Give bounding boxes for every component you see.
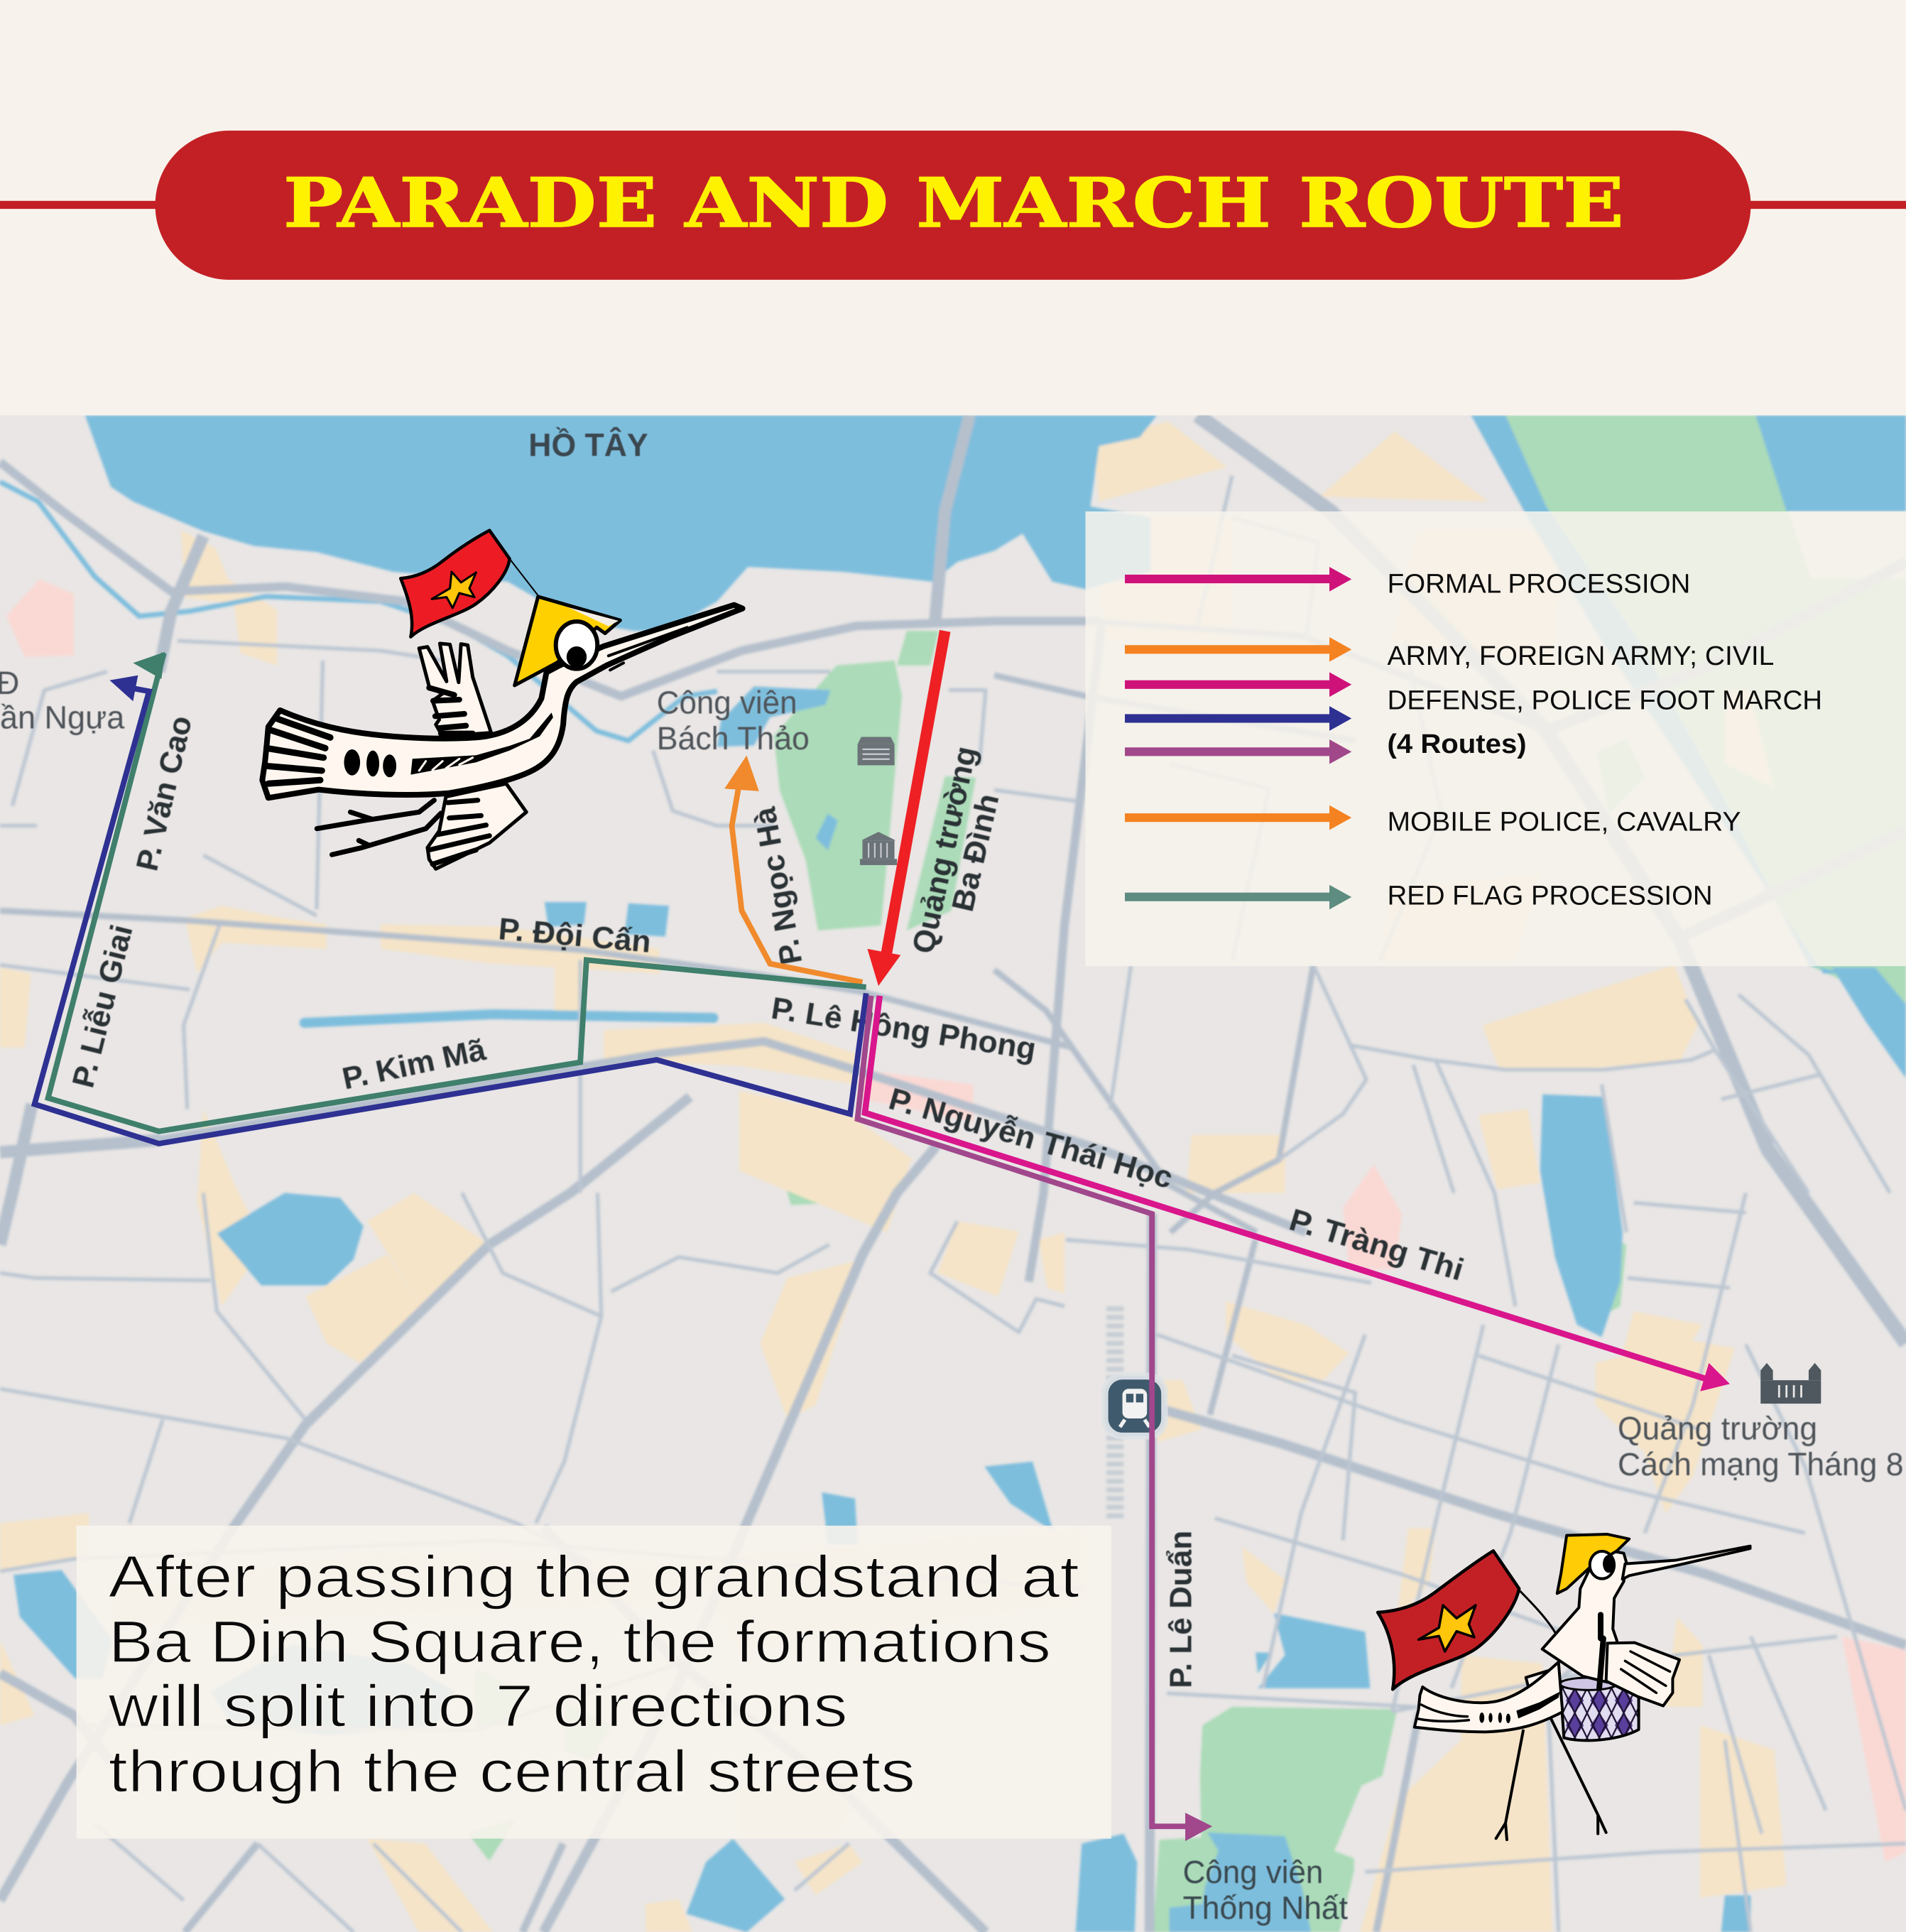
crane 1: eye bbox=[556, 622, 597, 669]
label: Bach Thao park bbox=[657, 685, 810, 756]
label: Le Duan: P. Lê Duẩn bbox=[1165, 1531, 1199, 1688]
crane 1: tail feathers bbox=[266, 719, 330, 783]
header rule bbox=[0, 201, 1906, 209]
street map base layer bbox=[0, 416, 1906, 1932]
crane 2: hat bbox=[1557, 1534, 1629, 1593]
label: Kim Ma: P. Kim Mã bbox=[339, 1033, 489, 1096]
note text: through the central streets bbox=[109, 1738, 915, 1804]
map: water bodies bbox=[13, 416, 1906, 1932]
crane 2: drum bbox=[1560, 1681, 1639, 1740]
route: red formal procession through Ba Dinh bbox=[867, 631, 945, 986]
label: Ba Dinh: Ba Đình bbox=[946, 791, 1006, 915]
legend panel bbox=[1086, 511, 1906, 966]
crane 2: eye bbox=[1590, 1551, 1614, 1579]
note text: will split into 7 directions bbox=[108, 1673, 848, 1740]
legend text: second line: DEFENSE, POLICE FOOT MARCH bbox=[1388, 685, 1822, 715]
legend arrow: civil defense bbox=[1125, 706, 1351, 731]
crane 2: right wing bbox=[1606, 1643, 1679, 1706]
route: navy bbox=[35, 675, 866, 1144]
map: parks and green areas bbox=[468, 416, 1906, 1932]
label: Ho Tay: HỒ TÂY bbox=[528, 427, 648, 463]
legend arrow: police foot march bbox=[1125, 739, 1351, 764]
crane 1: body and neck bbox=[262, 605, 743, 798]
label: Bach Thao park: Công viên bbox=[657, 685, 797, 721]
route: red flag procession, green bbox=[48, 652, 866, 1131]
map: built-up orange blocks bbox=[0, 421, 1787, 1932]
map: minor streets bbox=[0, 476, 1906, 1932]
crane 1: legs bbox=[317, 801, 441, 854]
label: Le Hong Phong: P. Lê Hồng Phong bbox=[769, 992, 1038, 1067]
page header background bbox=[0, 0, 1906, 416]
map: canals and small rivers bbox=[0, 482, 717, 1023]
crane 1: flag bbox=[401, 531, 510, 637]
crane 1: beak detail bbox=[609, 627, 687, 670]
route: orange, mobile police and cavalry via Ngoc Ha bbox=[724, 756, 862, 982]
crane 2: pupil bbox=[1603, 1555, 1615, 1573]
note text bbox=[108, 1544, 1079, 1804]
icon: mausoleum bbox=[860, 832, 897, 865]
crane 2: drum top bbox=[1560, 1678, 1617, 1690]
crane 1: flag star bbox=[432, 572, 476, 608]
crane 2: tail wing bbox=[1415, 1662, 1562, 1732]
icon: railway station bbox=[1101, 1373, 1168, 1439]
crane 1: spots bbox=[344, 749, 396, 777]
routes bbox=[35, 631, 1730, 1841]
crane 2: drum strap bbox=[1599, 1614, 1603, 1688]
label: August Revolution Square bbox=[1618, 1410, 1904, 1482]
crane 1: pupil bbox=[567, 646, 587, 668]
label: Hang Ngua: ần Ngựa bbox=[0, 699, 125, 735]
crane 1: inner wing strip bbox=[410, 712, 553, 775]
map background bbox=[0, 416, 1906, 1932]
legend arrow: army bbox=[1125, 637, 1351, 662]
legend text: four routes: (4 Routes) bbox=[1388, 729, 1527, 759]
crane 2: wing strip bbox=[1516, 1692, 1560, 1718]
map: main roads bbox=[0, 416, 1906, 1932]
illustration: flying crane with flag bbox=[262, 531, 743, 869]
crane 2: neck and chest bbox=[1542, 1551, 1626, 1682]
crane 2: flag star bbox=[1419, 1605, 1476, 1651]
crane 2: beak bbox=[1623, 1546, 1750, 1579]
legend text: formal procession: FORMAL PROCESSION bbox=[1388, 569, 1690, 599]
map: pink zones bbox=[6, 579, 1906, 1862]
label: Nguyen Thai Hoc: P. Nguyễn Thái Học bbox=[885, 1081, 1177, 1195]
route: purple to Thong Nhat park bbox=[858, 996, 1212, 1841]
crane 1: conical hat bbox=[515, 597, 620, 685]
label: Trang Thi: P. Tràng Thi bbox=[1285, 1203, 1468, 1288]
legend arrow: formal procession bbox=[1125, 567, 1351, 592]
header pill bbox=[156, 131, 1750, 280]
illustration: standing crane with drum and flag bbox=[1378, 1534, 1750, 1840]
note panel bbox=[77, 1526, 1111, 1839]
label: August Revolution Square: Cách mạng Tháng 8 bbox=[1618, 1446, 1904, 1482]
title: PARADE AND MARCH ROUTE bbox=[283, 163, 1624, 243]
legend bbox=[1125, 567, 1822, 911]
label: Bach Thao park: Bách Thảo bbox=[657, 720, 810, 756]
label: Thong Nhat park: Thống Nhất bbox=[1183, 1889, 1349, 1926]
label: Quang truong: Quảng trường bbox=[906, 744, 984, 957]
label: August Revolution Square: Quảng trường bbox=[1618, 1410, 1817, 1446]
note text: After passing the grandstand at bbox=[109, 1544, 1079, 1610]
legend arrow: red flag procession bbox=[1125, 885, 1351, 909]
legend arrow: foreign army bbox=[1125, 672, 1351, 697]
label: Ngoc Ha: P. Ngọc Hà bbox=[748, 804, 809, 967]
route: magenta to August Revolution Square bbox=[865, 996, 1730, 1391]
label: Thong Nhat park bbox=[1183, 1854, 1349, 1926]
legend text: army and police routes: ARMY, FOREIGN ARMY; CIVIL bbox=[1388, 641, 1774, 671]
crane 2: flag pole bbox=[1518, 1589, 1556, 1634]
icon: opera house bbox=[1760, 1363, 1821, 1404]
legend arrow: mobile police bbox=[1125, 805, 1351, 830]
crane 2: legs bbox=[1496, 1712, 1606, 1840]
map labels bbox=[0, 427, 1904, 1926]
crane 2: small wing behind bbox=[1526, 1669, 1556, 1688]
legend text: mobile police: MOBILE POLICE, CAVALRY bbox=[1388, 806, 1741, 837]
crane 2: flag bbox=[1378, 1551, 1519, 1689]
icon: government building 1 bbox=[858, 737, 895, 765]
label: Lieu Giai: P. Liễu Giai bbox=[65, 921, 139, 1091]
crane 1: flag pole bbox=[510, 559, 538, 595]
label: Thong Nhat park: Công viên bbox=[1183, 1854, 1323, 1890]
label: Van Cao: P. Văn Cao bbox=[130, 712, 199, 874]
note text: Ba Dinh Square, the formations bbox=[109, 1609, 1051, 1675]
label: Doi Can: P. Đội Cấn bbox=[497, 912, 653, 960]
crane 1: lower wing bbox=[428, 783, 526, 869]
legend text: red flag: RED FLAG PROCESSION bbox=[1388, 880, 1713, 911]
crane 2: tail spots bbox=[1479, 1713, 1510, 1723]
crane 1: upper wing bbox=[419, 644, 491, 737]
